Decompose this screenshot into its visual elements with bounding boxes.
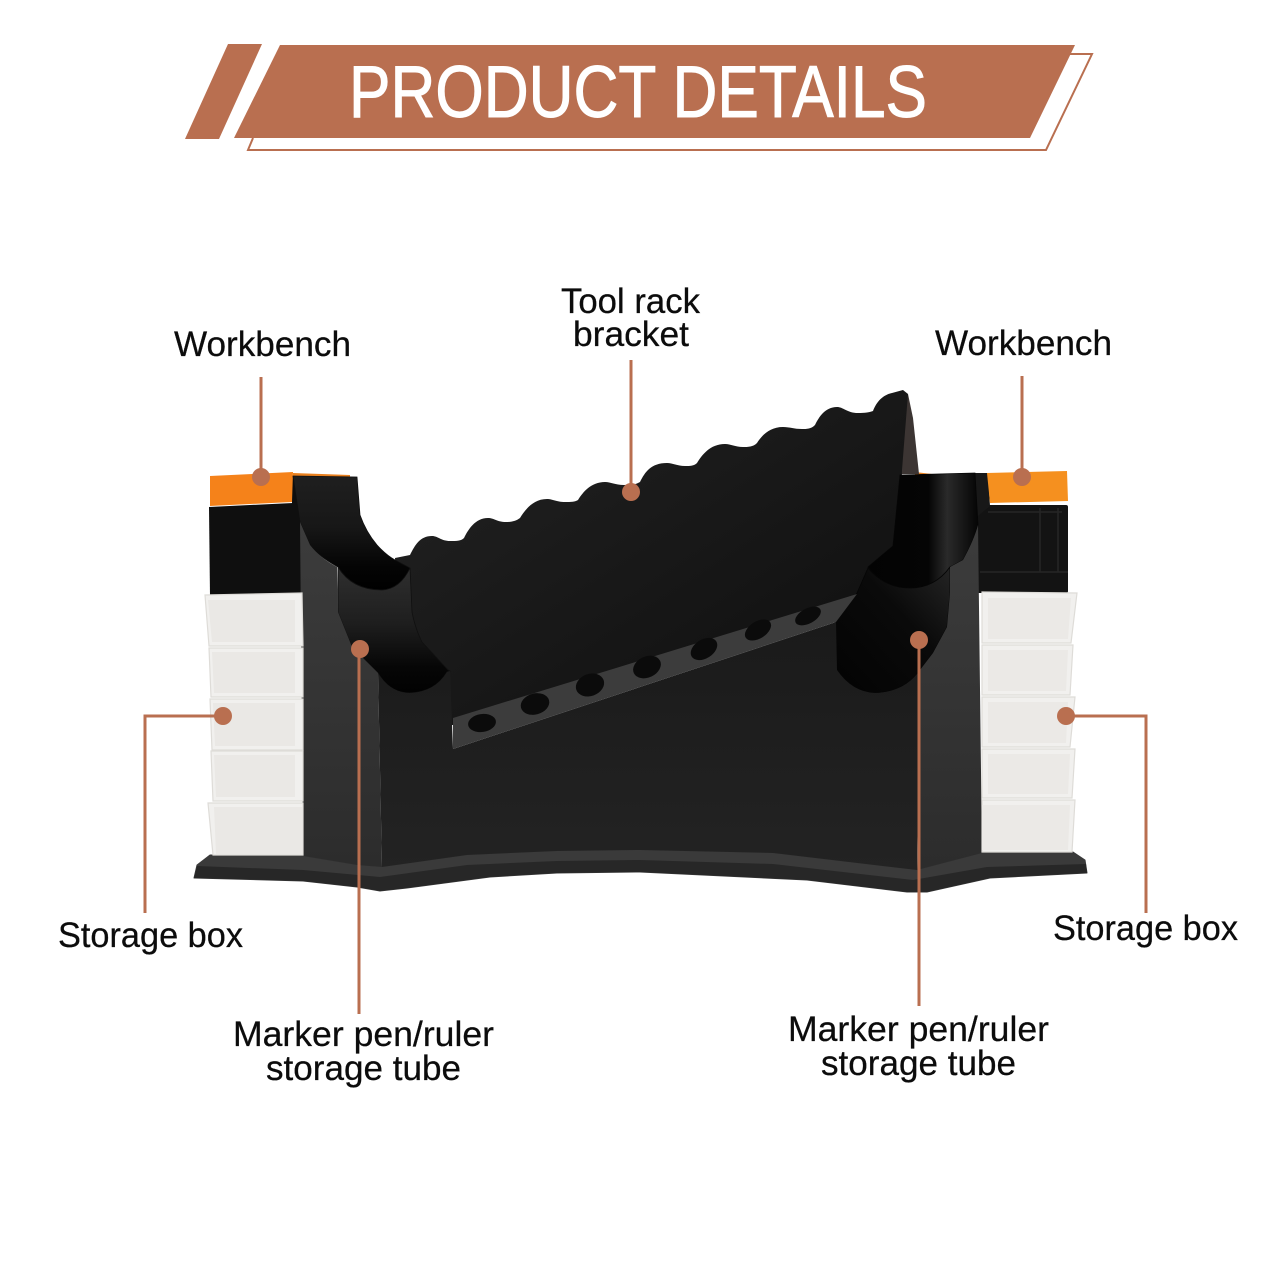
front wall bbox=[378, 622, 920, 870]
shelf holes bbox=[467, 603, 824, 734]
banner left stripe bbox=[185, 44, 262, 139]
right box inner panels bbox=[982, 598, 1071, 850]
left upper tube bbox=[293, 476, 410, 590]
rack side sliver bbox=[897, 394, 919, 474]
callout: tool rack bracket: Tool rack bbox=[561, 282, 700, 321]
left outer face bbox=[300, 522, 382, 867]
right orange workbench bbox=[987, 471, 1068, 503]
banner outline offset bbox=[248, 54, 1092, 150]
callout: workbench left bbox=[174, 325, 351, 486]
right block collar bbox=[973, 473, 990, 520]
tool rack bracket bbox=[395, 390, 908, 725]
title banner bbox=[185, 44, 1092, 150]
callout: workbench left: Workbench bbox=[174, 325, 351, 364]
left storage boxes bbox=[205, 593, 303, 855]
slanted perforated shelf bbox=[453, 594, 857, 749]
callout: marker pen tube right: storage tube bbox=[821, 1044, 1016, 1083]
right lower tube panel bbox=[835, 567, 950, 693]
callout: marker pen tube right: Marker pen/ruler bbox=[788, 1010, 1049, 1049]
block moulding lines bbox=[980, 508, 1068, 572]
base lower band bbox=[194, 860, 1087, 892]
orange slivers behind the tubes bbox=[293, 472, 932, 480]
base plate bbox=[194, 850, 1087, 892]
callout: marker pen tube right bbox=[788, 631, 1049, 1083]
callout: storage box left: Storage box bbox=[58, 916, 243, 955]
callout: tool rack bracket bbox=[561, 282, 700, 501]
callout: storage box left bbox=[58, 707, 243, 955]
callout: marker pen tube left bbox=[233, 640, 494, 1088]
left back block bbox=[209, 503, 302, 596]
callout: marker pen tube left: Marker pen/ruler bbox=[233, 1015, 494, 1054]
right back block bbox=[975, 505, 1068, 593]
title: PRODUCT DETAILS bbox=[349, 52, 927, 133]
right upper tube bbox=[868, 473, 978, 588]
banner main ribbon bbox=[234, 45, 1075, 138]
left orange workbench bbox=[210, 472, 293, 506]
callout: storage box right bbox=[1053, 707, 1238, 948]
left lower tube panel bbox=[338, 567, 450, 693]
callout: workbench right: Workbench bbox=[935, 324, 1112, 363]
callout: workbench right bbox=[935, 324, 1112, 486]
right storage boxes bbox=[982, 592, 1077, 852]
right outer face bbox=[917, 525, 982, 870]
callout: marker pen tube left: storage tube bbox=[266, 1049, 461, 1088]
left box inner panels bbox=[208, 600, 302, 854]
product photo: desk organizer bbox=[194, 390, 1087, 892]
left black collar bbox=[292, 476, 312, 536]
callout: tool rack bracket: bracket bbox=[573, 315, 689, 354]
callout: storage box right: Storage box bbox=[1053, 909, 1238, 948]
